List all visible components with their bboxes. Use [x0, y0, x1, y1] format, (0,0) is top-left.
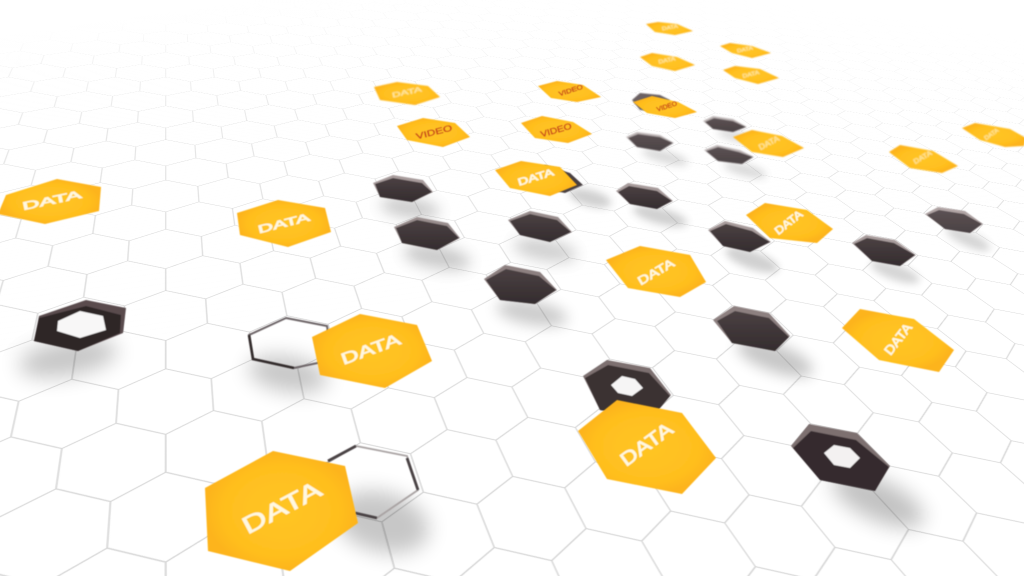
ring hexagon right — [791, 424, 890, 491]
outlined hexagon bottom — [318, 446, 418, 518]
data tile beside outlined hexagon: DATA — [339, 331, 404, 369]
data tile far second row — [640, 53, 695, 71]
data tile right side — [889, 145, 958, 173]
data tile far top — [646, 22, 693, 35]
dark hexagon center — [484, 265, 557, 304]
ring hexagon center — [583, 360, 671, 420]
data tile far second row right: DATA — [742, 70, 760, 80]
dark hexagon lower right — [713, 306, 790, 351]
data tile far left — [0, 179, 101, 224]
data tile far top: DATA — [662, 24, 679, 32]
video tile left: VIDEO — [415, 123, 454, 141]
data tile center upper: DATA — [517, 167, 556, 189]
dark hexagon far 2 — [703, 116, 747, 132]
video tile center: VIDEO — [539, 121, 573, 139]
data tile far top right: DATA — [737, 45, 754, 55]
data tile center large: DATA — [617, 419, 678, 471]
data tile right of far hexagons — [733, 130, 804, 157]
data tile top right corner — [962, 123, 1024, 147]
data tile beside outlined hexagon — [312, 314, 432, 388]
dark hexagon mid 1 — [373, 175, 433, 202]
dark hexagon mid 4 — [616, 183, 673, 209]
data tile far left: DATA — [21, 189, 84, 213]
dark hexagon right 2 — [925, 207, 983, 233]
outlined hexagon left — [249, 318, 332, 368]
ring hexagon left — [34, 300, 126, 351]
data tile right of far hexagons: DATA — [757, 134, 781, 152]
data tile left mid: DATA — [257, 211, 312, 236]
video tile right: VIDEO — [656, 100, 678, 114]
data tile upper left: DATA — [392, 86, 423, 100]
video tile center — [521, 116, 592, 143]
video tile upper — [538, 81, 601, 102]
dark hexagon mid 3 — [508, 211, 572, 242]
data tile center large — [578, 400, 716, 494]
dark hexagon mid 5 — [708, 221, 771, 252]
data tile right large: DATA — [881, 320, 915, 358]
data tile top right corner: DATA — [984, 128, 1000, 142]
cast shadows beneath raised hexagons — [16, 127, 993, 563]
data tile center mid: DATA — [635, 256, 677, 288]
data tile far second row right — [723, 66, 779, 84]
data tile large bottom left: DATA — [238, 476, 326, 540]
data tile large bottom left — [205, 451, 358, 571]
dark hexagon mid 2 — [394, 217, 460, 250]
data tile center mid — [606, 246, 706, 297]
video tile upper: VIDEO — [558, 84, 584, 98]
data tile far second row: DATA — [658, 56, 676, 66]
dark hexagon behind data tile — [530, 165, 583, 193]
dark hexagon behind video tile (far) — [632, 93, 670, 112]
dark hexagon far 3 — [704, 145, 754, 164]
data tile left mid — [237, 200, 331, 247]
data tile right large — [842, 309, 954, 372]
dark hexagon far 1 — [626, 132, 674, 151]
data tile upper left — [374, 82, 440, 105]
dark hexagon right 1 — [852, 235, 916, 266]
data tile far top right — [720, 43, 771, 58]
data tile right mid: DATA — [773, 208, 806, 238]
data tile right mid — [746, 203, 833, 243]
video tile right — [633, 96, 697, 118]
data tile center upper — [495, 161, 577, 196]
data tile right side: DATA — [913, 150, 934, 166]
video tile left — [397, 118, 470, 147]
